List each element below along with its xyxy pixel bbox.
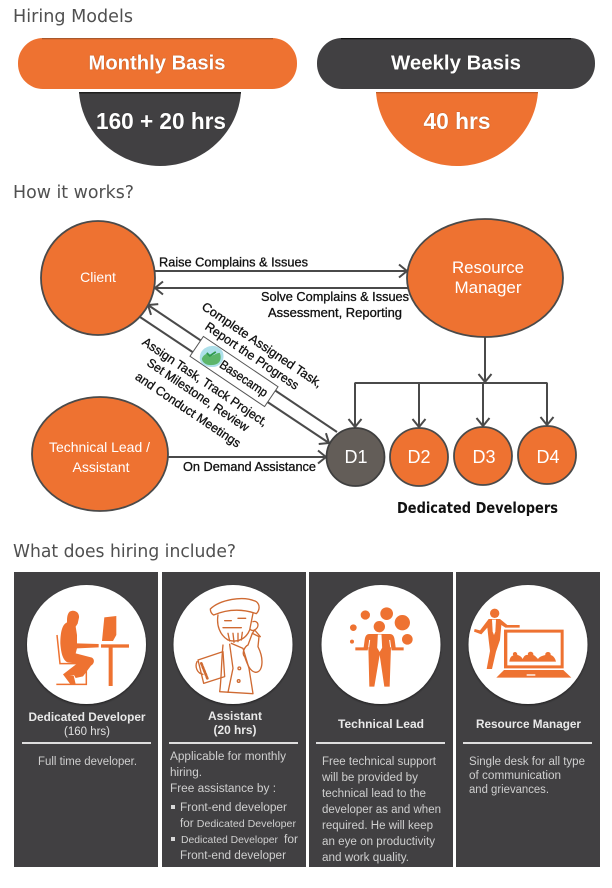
node: D4: D4 [536, 447, 560, 467]
label: assign task: and Conduct Meetings [133, 370, 243, 450]
label: solve complains: Solve Complains & Issues [261, 290, 409, 304]
description: for [284, 834, 298, 846]
label: assign task: Set Milestone, Review [144, 356, 252, 435]
icon: presenter with laptop [474, 609, 571, 678]
arrow: technical lead to developer [168, 456, 326, 458]
node: resource manager: Resource [452, 259, 524, 277]
node: D4 [518, 426, 576, 484]
panel: assistant [162, 572, 306, 867]
description: for Dedicated Developer [180, 818, 297, 830]
description: Free assistance by : [170, 783, 276, 795]
icon: assistant illustration [196, 599, 262, 694]
node: D2 [390, 428, 448, 486]
arrow: client to developer [140, 317, 329, 443]
label: complete assigned task: Report the Progress [202, 319, 302, 393]
monthly pill: Monthly Basis [88, 52, 225, 74]
basecamp badge: Basecamp [217, 357, 270, 400]
monthly hours semicircle: 160 + 20 hrs [96, 108, 226, 134]
description: technical lead to the [322, 788, 426, 800]
heading: What does hiring include?: What does hiring include? [13, 541, 236, 562]
node: technical lead / assistant: Technical Lead / [49, 439, 150, 455]
weekly pill [317, 38, 595, 89]
heading: Hiring Models: Hiring Models [13, 6, 133, 27]
label: assign task: Assign Task, Track Project, [140, 335, 270, 429]
node: client [41, 221, 155, 335]
arrows: branch to developers [354, 383, 548, 427]
icon: juggling consultant [350, 607, 413, 687]
weekly hours semicircle [376, 92, 538, 166]
description: hiring. [170, 767, 202, 779]
panel: dedicated developer [14, 572, 158, 867]
panel: monthly basis [18, 38, 297, 166]
title: Assistant [208, 711, 262, 723]
node: resource manager [407, 219, 563, 337]
panel: weekly basis [317, 38, 595, 166]
hours: (160 hrs) [64, 726, 110, 738]
title: Resource Manager [476, 719, 582, 731]
description [321, 756, 441, 864]
description: an eye on productivity [322, 836, 435, 848]
description: will be provided by [321, 772, 418, 784]
node: resource manager: Manager [454, 279, 522, 297]
flow diagram [32, 219, 576, 517]
label: on demand assistance: On Demand Assistance [183, 460, 316, 474]
basecamp badge [188, 334, 280, 409]
weekly pill: Weekly Basis [391, 52, 521, 74]
node: D3: D3 [472, 447, 496, 467]
description: Front-end developer [180, 802, 287, 814]
label: raise complains: Raise Complains & Issues [159, 256, 308, 270]
panel: technical lead [309, 572, 453, 867]
monthly hours semicircle [79, 92, 241, 166]
icon: developer at desk [56, 611, 129, 686]
node: D2: D2 [407, 447, 431, 467]
label: assessment: Assessment, Reporting [268, 306, 402, 320]
icon: basecamp logo [200, 346, 224, 367]
description: Full time developer. [38, 756, 137, 768]
node: D3 [454, 427, 512, 485]
label: dedicated developers: Dedicated Developers [397, 499, 558, 517]
hours: (20 hrs) [214, 725, 257, 737]
description: Single desk for all type [469, 756, 585, 768]
node: client: Client [80, 269, 116, 285]
node: technical lead / assistant: Assistant [72, 459, 130, 475]
description: required. He will keep [322, 820, 433, 832]
description: Free technical support [322, 756, 437, 768]
description: and grievances. [469, 784, 549, 796]
node: technical lead / assistant [32, 397, 168, 511]
heading: How it works?: How it works? [13, 182, 134, 203]
description: and work quality. [322, 852, 409, 864]
arrow: resource manager to client [155, 287, 408, 289]
description: Front-end developer [180, 850, 286, 862]
description [469, 756, 585, 796]
node: D1 [326, 428, 384, 486]
weekly hours semicircle: 40 hrs [424, 108, 490, 134]
description: developer as and when [322, 804, 441, 816]
description: of communication [469, 770, 561, 782]
node: D1: D1 [344, 447, 368, 467]
description: Dedicated Developer [181, 834, 278, 846]
monthly pill [18, 38, 297, 89]
title: Technical Lead [338, 719, 424, 731]
label: complete assigned task: Complete Assigned Task, [199, 299, 325, 391]
description [170, 751, 298, 862]
title: Dedicated Developer [28, 712, 146, 724]
arrow: client to resource manager [155, 270, 407, 272]
arrow: developer to client [148, 305, 337, 432]
arrow: resource manager down [484, 337, 486, 382]
description: Applicable for monthly [170, 751, 286, 763]
panel: resource manager [456, 572, 600, 867]
